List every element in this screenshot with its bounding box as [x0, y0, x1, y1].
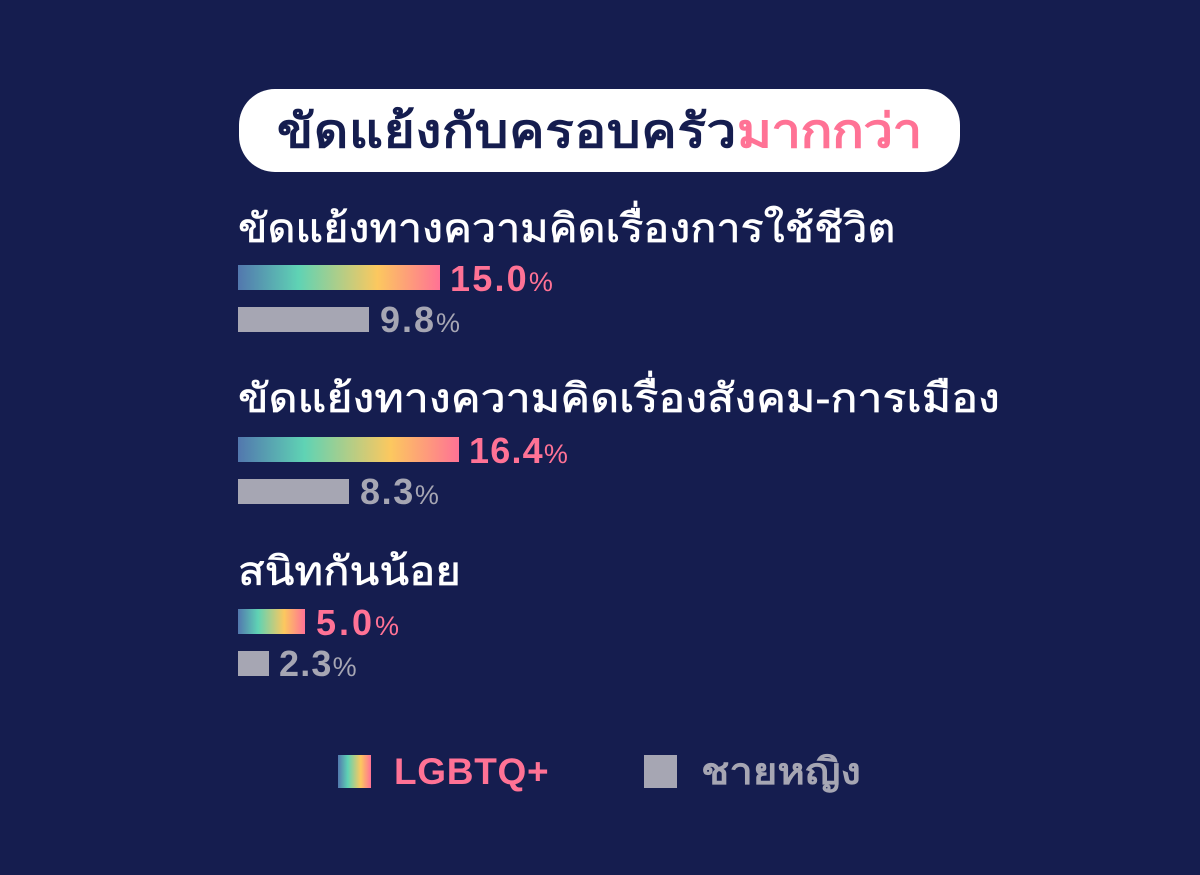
heading 2: ขัดแย้งทางความคิดเรื่องสังคม-การเมือง [238, 377, 1000, 421]
LGBTQ+ bar 5.0% [238, 609, 305, 634]
legend swatch: LGBTQ+ [338, 755, 371, 788]
men and women value: 8.3% [360, 471, 439, 512]
men and women value: 2.3% [279, 643, 357, 684]
LGBTQ+ bar 15.0% [238, 265, 440, 290]
heading 1: ขัดแย้งทางความคิดเรื่องการใช้ชีวิต [238, 207, 895, 251]
LGBTQ+ value: 5.0% [316, 602, 399, 643]
LGBTQ+ bar 16.4% [238, 437, 459, 462]
men and women value: 9.8% [380, 299, 460, 340]
legend [338, 751, 861, 793]
LGBTQ+ value: 15.0% [450, 258, 553, 299]
men and women bar 2.3% [238, 651, 269, 676]
legend label: men and women: ชายหญิง [701, 751, 861, 792]
LGBTQ+ value: 16.4% [469, 430, 568, 471]
title pill [239, 89, 960, 172]
legend label: LGBTQ+: LGBTQ+ [394, 751, 549, 792]
men and women bar 9.8% [238, 307, 369, 332]
group 2: socio-political conflict [238, 370, 1000, 512]
heading 3: สนิทกันน้อย [238, 550, 461, 594]
men and women bar 8.3% [238, 479, 349, 504]
group 1: lifestyle conflict [238, 200, 895, 340]
title text: ขัดแย้งกับครอบครัวมากกว่า [277, 104, 922, 157]
group 3: spending little time [238, 550, 461, 684]
legend swatch: men and women [644, 755, 677, 788]
